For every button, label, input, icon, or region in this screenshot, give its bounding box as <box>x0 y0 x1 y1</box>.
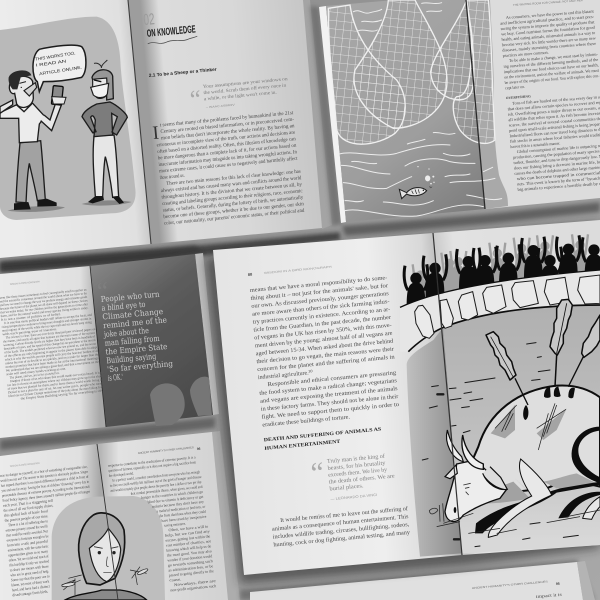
left page text: blind eye to Climate Change remind me of the joke about the man falling from <box>8 385 104 398</box>
left page text: rising temperatures continue to bring more droughts and stronger storms in <box>2 316 92 329</box>
eyes and nose <box>94 547 118 548</box>
page text and quote: thing about it – not just for the animals' sake, but for <box>250 282 388 302</box>
mosquito left <box>61 575 82 595</box>
page text and quote: and vegans are exposing the treatment of the animals <box>260 385 399 405</box>
wounds <box>491 403 567 450</box>
right page text: knowing which will help us do <box>166 544 211 553</box>
page text and quote: their decision to go vegan, the main reasons were their <box>256 347 394 365</box>
left page text <box>0 287 107 402</box>
left page text: you and one far away. Saving the lives of children "drowning" every day in <box>1 480 89 493</box>
page text and quote: includes wildlife trading, circuses, bullfighting, rodeos, <box>272 521 410 541</box>
quote text: joke about the <box>103 326 149 339</box>
page text and quote: are more aware than others of the sick farming indus- <box>252 298 390 318</box>
page text and quote: industrial agriculture.³⁰ <box>258 369 314 381</box>
head <box>445 460 507 522</box>
page text and quote: — LEONARDO DA VINCI <box>330 493 377 501</box>
foreground crowd <box>404 235 600 325</box>
left page text: the poorest people of our time. <box>4 514 49 523</box>
sand right page <box>443 305 600 553</box>
left page text: extreme poverty around the world <box>5 524 48 533</box>
left page text: opportunities given to so many <box>8 549 48 558</box>
bull body <box>467 385 600 493</box>
right page text: response to contribute to the eradication of extreme poverty. It is a <box>108 455 196 468</box>
page text and quote: Truly man is the king of <box>327 453 385 465</box>
left page text: There is a lot of suffering due to <box>8 519 48 527</box>
left page text: scale will need many hands working as one. <box>6 367 66 376</box>
right dark page <box>90 254 213 427</box>
page text and quote: means that we have a moral responsibility to do some- <box>250 275 388 294</box>
page edge strip <box>212 431 240 600</box>
page text and quote: eradicate these buildings of torture. <box>262 413 351 429</box>
banderilla two <box>550 299 572 387</box>
overfishing text: practices are more common. <box>502 50 549 58</box>
running head: WISDOM IN A BIRD MONOGRAPH <box>264 265 332 275</box>
right page text: vast number of charities, not <box>166 539 212 549</box>
body text: color, our nationality, our parents' economic status, or their political and <box>164 208 305 227</box>
left page text: that could be easily avoided. Not <box>6 529 49 538</box>
under body shadow <box>475 478 600 533</box>
right page text: excuse, getting lost within the <box>165 534 211 544</box>
horn right <box>462 435 483 469</box>
right page text: go towards something such <box>168 559 213 568</box>
right page text: that combat preventable illness, when given, we could end <box>131 485 203 497</box>
page text and quote: Responsible and ethical consumers are pressuring <box>267 370 396 388</box>
body text: mon beliefs that don't incorporate the whole reality. By having an <box>161 122 295 141</box>
wall top line <box>400 270 600 307</box>
left page text: would you not act? The answer to this question is obviously positive. Singer <box>0 470 89 483</box>
left page text: Imagine if those of us who share this world made our voices heard. It is not <box>10 370 105 383</box>
page text and quote <box>250 275 412 549</box>
overfishing text: harvest fish in a sustainable manner. <box>510 140 560 149</box>
page <box>250 562 583 600</box>
left page text: The science is clear: there are over thirty thousand peer reviewed papers on <box>6 327 96 340</box>
body text: Century are rooted on biased information, or in preconceived com- <box>160 116 294 135</box>
shoulders <box>65 590 147 600</box>
right page text: hunger in the countries in which children go <box>141 490 203 500</box>
left page text: seem like these issues sometimes to feel conceptually small to gather us <box>0 288 87 300</box>
left page text: and how we need to change the way we produce energy and consume goods <box>0 295 88 307</box>
quote text <box>100 289 174 383</box>
left page text: this global lack of basic food <box>4 509 48 518</box>
page text and quote: It would be remiss of me to leave out the suffering of <box>280 505 408 524</box>
man: collar <box>17 104 32 112</box>
pull quote: “ <box>189 84 202 114</box>
blood drips at the spine <box>544 387 575 398</box>
left page in grey <box>326 0 485 222</box>
overfishing text: To be able to make a change, we must start by inform- <box>509 51 599 64</box>
body text: often based on a distorted reality. Often, this illusion of knowledge can <box>157 135 296 155</box>
face <box>89 528 121 582</box>
nostril <box>454 507 456 513</box>
page text and quote: HUMAN ENTERTAINMENT <box>264 440 341 452</box>
quote text: the Empire State <box>105 342 168 357</box>
woman: face and mask <box>93 78 107 98</box>
body text <box>152 109 305 227</box>
left page text: of trees that we planted for them, and to leave them a world worth living in. <box>7 378 104 392</box>
body text: those around us. <box>159 173 185 181</box>
right page text: the most good. You may also <box>167 549 212 558</box>
net bag far right <box>453 0 495 143</box>
left page text: thousands of years, and the speed of this change has no precedent in the record <box>4 338 96 352</box>
left page text: and the scientific consensus around the world about what we have to do <box>0 291 87 304</box>
right page text: Often, we have a will to <box>168 525 209 533</box>
left page text: disadvantage from birth. <box>12 590 48 597</box>
banderilla three <box>568 315 600 387</box>
left page text: It is not a matter of politics or of belief. <box>1 312 61 322</box>
page text and quote: our own. As discussed previously, younger generations <box>251 291 390 310</box>
left page text: The planet, and we, are in for an awful lot. <box>9 371 60 381</box>
left page text: that we make today, for our children and for the generations to come after <box>0 302 89 316</box>
left page text <box>0 465 101 597</box>
overfishing text: OVERFISHING <box>506 94 531 100</box>
large decorative quote marks <box>150 377 212 426</box>
crowd silhouettes <box>404 234 600 325</box>
left page text: the aim of all our food supply chains, <box>3 504 54 514</box>
ear left <box>445 465 457 479</box>
right page text: malaria because they don't have any <box>152 500 204 509</box>
pull quote: – ISAAC ASIMOV <box>206 103 235 109</box>
spine line <box>97 444 118 600</box>
page text and quote: animals as a consequence of human entertainment. This <box>272 513 409 533</box>
page text and quote: beasts, for his brutality <box>327 460 386 472</box>
body text: creating and labeling groups according to their religions, race, economic <box>162 188 303 207</box>
ear right with shadow <box>483 467 507 490</box>
main open book: bullfight <box>205 220 600 584</box>
left page text: hard, and have had a distinct <box>12 584 51 593</box>
left page <box>0 0 151 258</box>
overfishing text: become very sick. It's little wonder there are so many new <box>502 35 596 47</box>
overfishing text: suring the system to improve the quality of products that <box>501 19 595 31</box>
background crowd <box>413 234 588 318</box>
overfishing text: implications that our food choices can have on our health, <box>504 62 599 75</box>
hair <box>79 513 125 585</box>
ground shadows <box>7 206 65 212</box>
foreleg <box>488 459 552 537</box>
left page text: It is true that many political leaders still refuse to accept the facts, and <box>4 313 93 326</box>
bullfight illustration <box>400 234 600 557</box>
left page text: them, and for the natural world and every species living within it today. <box>0 306 89 319</box>
mosquito right <box>130 567 149 585</box>
sand area left page <box>407 327 462 557</box>
body text: more extreme cases, it could cause us to negatively and harmfully affect <box>159 155 298 175</box>
left page text: of the effects are only beginning to appear in the places least able to adapt, <box>4 345 99 359</box>
net bag centre <box>354 0 447 128</box>
running head: WISDOM IN A BIRD MONOGRAPH <box>10 280 40 286</box>
right page grey wave <box>466 0 508 209</box>
body text: inaccurate information may misguide us into taking wrongful actions. In <box>158 148 298 168</box>
book spread: on knowledge <box>0 0 340 272</box>
right page text: In a perfect world, a modest contribution from everyone who has enough <box>112 470 200 484</box>
man: head <box>9 76 33 107</box>
left page text: this hardship if only we resolved <box>9 559 49 568</box>
body text: become one of these groups, whether it be due to our gender, our skin <box>163 200 304 220</box>
speech bubble: THIS WORKS TOO, <box>35 50 76 62</box>
page text and quote: “ <box>310 456 326 490</box>
left page text: born into a safe and peaceful <box>7 539 48 548</box>
right page text: and would certainly give people above the poverty line a dollar or two per day. <box>110 480 202 493</box>
quote text: man falling from <box>104 334 160 348</box>
pull quote: the world. Scrub them off every once in <box>203 83 287 96</box>
opening quote mark: “ <box>96 276 109 306</box>
man: arm and phone <box>41 100 63 131</box>
man: trousers <box>16 141 45 203</box>
page text and quote: hunting, cock or dog fighting, animal testing, and many <box>273 529 410 549</box>
chapter heading: ON KNOWLEDGE <box>146 23 196 40</box>
speech bubble <box>33 45 86 92</box>
net bag left <box>328 5 405 144</box>
spine line <box>466 0 485 209</box>
page text and quote: burial places. <box>329 483 364 492</box>
quote text: 'So far everything <box>107 359 173 374</box>
nets and waves illustration <box>328 0 502 216</box>
right page text: as administration fees, or be <box>168 564 214 574</box>
body text: status, or beliefs. Generally, during the lottery of birth, we automatically <box>162 194 304 214</box>
bubbles <box>417 166 435 188</box>
book spread: fishing nets <box>310 0 600 236</box>
running head right: ANCIENT HUMANITY'S OTHER CHALLENGES <box>138 445 194 455</box>
man: shirt <box>0 103 45 143</box>
quote text: remind me of the <box>103 315 168 330</box>
hind leg <box>583 497 600 519</box>
text fragment: impact it is <box>536 592 562 599</box>
body text: t seems that many of the problems faced by humankind in the 21st <box>160 109 294 128</box>
left page text: modest promises that have been made so far at the international meetings. <box>5 356 99 369</box>
right page <box>128 0 322 244</box>
left page text: of the Earth. The models predicted what we now see around us, and the worst <box>4 342 96 355</box>
right page <box>433 220 600 555</box>
page text and quote: the food system to make a radical change; vegetarians <box>259 377 398 397</box>
body text: throughout history. It is the division that we create between us all, by <box>161 182 303 201</box>
belly shade <box>543 473 600 488</box>
hip crescent <box>572 427 600 483</box>
quote text: People who turn <box>100 290 160 304</box>
book spread: climate change quote <box>0 245 219 450</box>
right page text: die from diarrhoea when they could <box>159 510 206 518</box>
left page text: We understand that we are asking a great deal, and that a movement on this <box>6 360 100 374</box>
body text: erroneous or incomplete view of the truth, our actions and decisions are <box>156 129 296 148</box>
page text and quote: try practices currently in existence. According to an ar- <box>253 307 391 326</box>
book spread: woman and mosquitoes <box>0 431 240 600</box>
left page text: others. Yet we could end much of <box>9 554 49 563</box>
page edge strip <box>577 561 595 600</box>
left page text: most regions of the world, while the ice caps melt and sea levels keep rising <box>2 320 92 334</box>
woman: trousers <box>93 135 119 197</box>
woman: top and arms <box>82 102 127 137</box>
overfishing text: health, and eating animals, mistreated animals is a way to <box>501 30 595 43</box>
left page text: because the future of the planet we all share will depend on these choices <box>0 298 88 311</box>
speech bubble: I READ AN <box>35 58 67 68</box>
quote text: Climate Change <box>102 307 164 322</box>
running head: ANCIENT HUMANITY'S OTHER CHALLENGES <box>472 579 548 590</box>
left text page <box>0 266 106 438</box>
page text and quote: concern for the planet and the suffering of animals in <box>257 353 395 373</box>
right page text: help, but we can find any <box>165 529 210 539</box>
left page text: each year. That is a staggering toll <box>3 499 53 508</box>
left page text: blame, yet most of them work <box>11 579 50 588</box>
net bag right <box>431 0 474 100</box>
page number: 88 <box>248 272 253 277</box>
book spread: bottom edge page <box>240 560 595 600</box>
spine line <box>128 0 151 244</box>
spine line <box>433 233 462 555</box>
illustration: woman and mosquitoes <box>52 496 165 600</box>
woman: shoes <box>88 196 124 204</box>
overfishing text: cept later on. <box>505 84 525 90</box>
body text: There are two main reasons for this lack of clear knowledge: one has <box>166 168 301 187</box>
left page text: has argued that there is no moral difference between a child in front of <box>1 475 89 488</box>
right page text: to live on could swiftly lift millions out of the grief of hunger and disease <box>110 475 202 488</box>
quote text: a blind eye to <box>101 300 146 313</box>
left page text: unless the rest of us decide to act quickly, and on a scale far larger than the <box>5 352 100 366</box>
left page text: environment, with the same basic <box>8 544 49 554</box>
body text: always existed and has caused many wars and conflicts around the world <box>161 174 302 194</box>
overfishing text: we buy. Good nutrition forms the foundation for good <box>501 25 596 37</box>
left page text: the matter, and nearly all agree that humans are the main cause of the current <box>3 331 95 345</box>
left page text: Food Policy Agency, three times around 9 million people die of hunger <box>2 490 91 504</box>
chapter heading: 02 <box>143 11 155 29</box>
right page text: saving measures. <box>164 522 186 528</box>
wall bottom line <box>408 305 600 352</box>
woman: hair <box>92 70 113 100</box>
left page text: too late to choose an atmosphere where our children may grow up in the shade <box>7 374 104 387</box>
left page <box>213 233 462 575</box>
right page text: the developed world. <box>109 472 134 478</box>
chapter heading <box>143 7 198 45</box>
right page text <box>108 455 217 597</box>
right page text: non-profit organisations such <box>170 584 216 592</box>
eye <box>463 483 471 495</box>
banderilla one <box>486 332 528 420</box>
pull quote <box>189 76 291 114</box>
pull quote: Your assumptions are your windows on <box>203 77 288 90</box>
blow from the nose <box>429 503 444 522</box>
page text and quote: aged between 15-34. When asked about the drive behind <box>256 339 394 357</box>
right page paper <box>466 0 600 209</box>
page text and quote: of vegans in the UK has risen by 350%, with this move- <box>254 322 392 341</box>
running head left: WISDOM IN A BIRD MONOGRAPH <box>10 462 40 468</box>
overfishing text: that does not allow certain species to recover and replen- <box>507 99 600 111</box>
quote text: Building saying <box>106 352 157 365</box>
grey leg shading <box>480 482 530 503</box>
waves <box>339 3 502 216</box>
right page text: blind due to vitamin A deficiency or get <box>147 495 204 504</box>
page text and quote: in these factory farms. They should not be alone in their <box>261 393 399 413</box>
wall panels <box>415 275 600 338</box>
overfishing text: diseases, mainly stemming from countries where these <box>502 41 596 54</box>
overfishing text: As consumers, we have the power to end this blatant <box>506 8 595 21</box>
speech bubble: ARTICLE ONLINE. <box>39 65 82 76</box>
horn left <box>447 430 463 462</box>
page text and quote: ment driven by the young; almost half of all vegans are <box>255 330 393 349</box>
page text and quote: fight. We need to support them to quickly in order to <box>261 401 399 421</box>
left page text: which is why the world's poorest people will carry the heaviest burden of all <box>5 349 99 362</box>
fish <box>399 188 427 199</box>
main book shadow <box>205 222 600 584</box>
left page text: with each passing year of inaction. <box>2 327 58 336</box>
left page text: the Empire State Building saying 'So far everything is OK.' <box>20 389 105 401</box>
left page text: preventable diseases of extreme poverty. According to the International <box>2 485 90 498</box>
right page text: have been saved by inexpensive <box>161 515 207 523</box>
page text and quote: DEATH AND SUFFERING OF ANIMALS AS <box>264 427 382 443</box>
left page text: to share our means with those <box>10 564 49 572</box>
body text: be more dangerous than a complete lack of it, for our actions based on <box>158 142 297 162</box>
grey rounded panel <box>52 496 165 600</box>
right page text: question of fairness, especially as it does not require a big sacrifice from <box>108 460 196 474</box>
right page <box>97 432 228 600</box>
left page text: everyone is fortunate enough to be <box>6 534 49 543</box>
left page text: who are in great need of help. <box>10 569 49 577</box>
overfishing text: ing ourselves of the different farming methods, and of the <box>503 57 599 70</box>
page text and quote: the death of others. We are <box>329 473 395 486</box>
left page text: was no danger to yourself, or a fear of something of comparable size, <box>0 465 88 479</box>
right page text: wonder if your donation would <box>167 554 212 563</box>
left page <box>0 444 118 600</box>
arena wall <box>400 270 600 352</box>
left page text: Denial is not a plan for any of us. As one writer put it, people who turn a <box>8 381 104 395</box>
right page text: a malarial medication or bed nets, or <box>156 505 206 514</box>
page number: 95 <box>556 582 560 586</box>
left page text: Some say that the poor are to <box>11 574 50 582</box>
left page text: warming. Carbon dioxide levels are higher than they have been in hundreds of <box>3 334 96 347</box>
overfishing text: who can become trapped in commercial fishing <box>517 169 600 181</box>
right page text: Nowadays, there are <box>174 579 216 588</box>
right page text: passed to going directly to the <box>169 569 214 578</box>
ground hatching <box>437 510 600 533</box>
overfishing text: and inefficient agricultural practice, and to start pres- <box>500 14 595 27</box>
page text and quote: exceeds them. We live by <box>328 467 387 479</box>
white page edge <box>319 6 346 223</box>
man: shoes <box>14 199 57 210</box>
dashes in the sand <box>422 343 578 547</box>
pull quote: a while, or the light won't come in. <box>204 91 277 102</box>
overfishing text <box>500 8 600 192</box>
quote text: is OK.' <box>108 373 123 383</box>
spine line <box>90 266 106 427</box>
right page text: cause. <box>169 577 182 583</box>
page number: 96 <box>197 447 201 451</box>
illustration: man and masked woman <box>0 17 136 220</box>
section title: 2.1 To be a Sheep or a Thinker <box>149 67 217 78</box>
body text: I <box>152 123 160 144</box>
page edge strip <box>195 253 219 415</box>
page text and quote: ticle from the Guardian, in the past decade, the number <box>253 314 391 334</box>
